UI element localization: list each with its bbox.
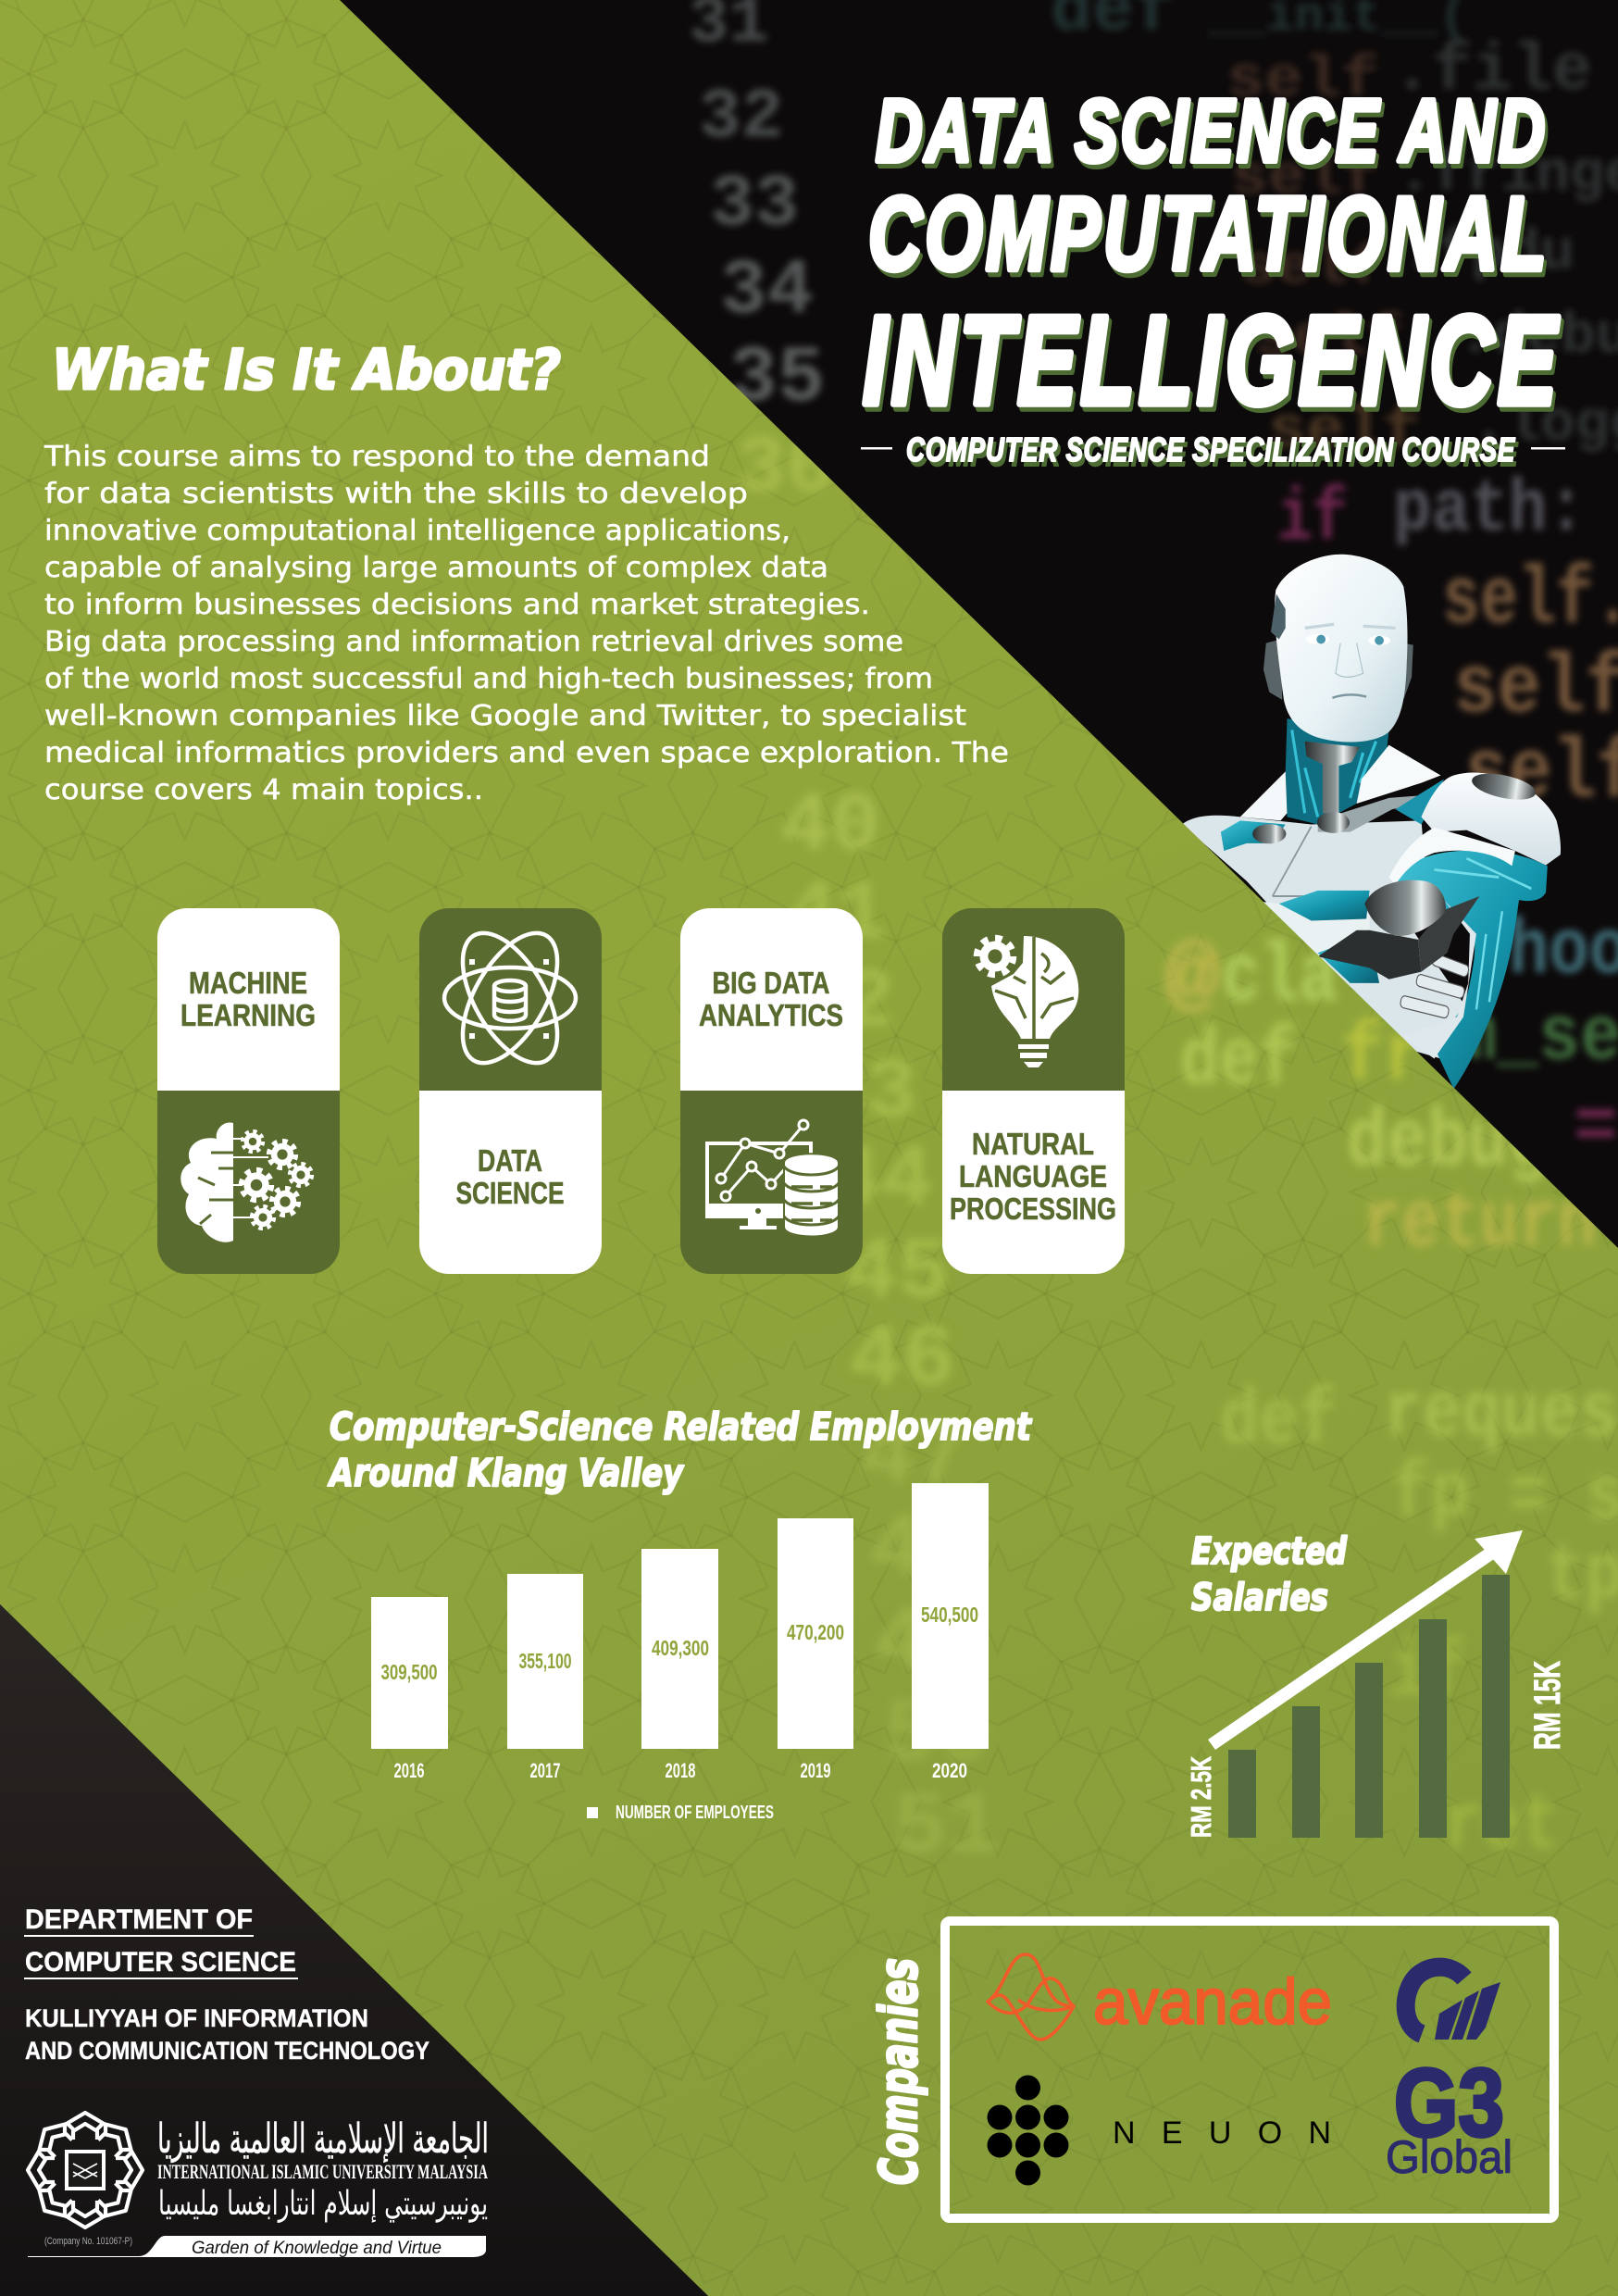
blurred code text showing through green: 40 bbox=[780, 780, 880, 875]
card: machine learning: LEARNING bbox=[180, 998, 316, 1032]
blurred code text showing through green: 51 bbox=[893, 1778, 1000, 1878]
university logo bbox=[28, 2113, 489, 2258]
robot forearm bbox=[1247, 891, 1370, 953]
blurred code text on the dark area: .fpdu bbox=[1402, 220, 1574, 286]
bar 2018: 409,300 bbox=[652, 1636, 709, 1660]
blurred code text on the dark area: 33 bbox=[710, 163, 799, 247]
card: big data analytics: ANALYTICS bbox=[699, 998, 843, 1032]
heading: employment chart bbox=[328, 1404, 1032, 1495]
robot neck bbox=[1286, 718, 1389, 824]
bar 2016: 2016 bbox=[394, 1759, 424, 1782]
blurred code text showing through green: 50 bbox=[884, 1685, 990, 1786]
body paragraph: course covers 4 main topics.. bbox=[44, 774, 483, 806]
blurred code text showing through green: def bbox=[1220, 1377, 1338, 1466]
bar 2019 bbox=[778, 1518, 853, 1782]
body paragraph: of the world most successful and high-tech businesses; from bbox=[44, 663, 933, 695]
robot nose and mouth bbox=[1332, 643, 1366, 698]
logo: G3 Global: Global bbox=[1386, 2131, 1512, 2183]
department text bbox=[24, 1904, 429, 2065]
robot torso bbox=[1182, 816, 1473, 1063]
robot shoulder pad bbox=[1422, 772, 1561, 866]
icon: monitor chart and database bbox=[705, 1120, 839, 1237]
department text: KULLIYYAH OF INFORMATION bbox=[25, 2004, 368, 2032]
blurred code text on the dark area: path: bbox=[1393, 468, 1586, 553]
bar 2017: 2017 bbox=[529, 1759, 561, 1782]
icon: atom with database bbox=[443, 917, 577, 1079]
card: natural language processing: NATURAL bbox=[972, 1127, 1094, 1161]
heading: expected salaries: Expected bbox=[1191, 1530, 1347, 1573]
bar 2020 bbox=[912, 1483, 989, 1782]
arabic university name: الجامعة الإسلامية العالمية ماليزيا bbox=[157, 2115, 489, 2163]
heading: companies: Companies bbox=[869, 1958, 929, 2185]
blurred code text showing through green bbox=[737, 424, 1618, 1878]
tagline bar: Garden of Knowledge and Virtue bbox=[192, 2239, 442, 2258]
body paragraph: innovative computational intelligence applications, bbox=[44, 515, 790, 547]
blurred code text showing through green: 42 bbox=[794, 956, 894, 1051]
blurred code text on the dark area: 32 bbox=[699, 78, 783, 157]
robot eyes bbox=[1305, 624, 1396, 645]
logo: neuon bbox=[987, 2076, 1331, 2185]
blurred code text showing through green: @ bbox=[1164, 931, 1220, 1026]
bar 2018 bbox=[641, 1549, 718, 1782]
card: natural language processing bbox=[942, 908, 1125, 1274]
salary bars bbox=[1228, 1575, 1510, 1838]
body paragraph: capable of analysing large amounts of complex data bbox=[44, 552, 828, 584]
heading: expected salaries bbox=[1191, 1530, 1347, 1619]
card: data science: DATA bbox=[478, 1143, 542, 1178]
blurred code text on the dark area: 34 bbox=[720, 248, 814, 336]
chart legend: NUMBER OF EMPLOYEES bbox=[616, 1803, 774, 1823]
label: RM 2.5K: RM 2.5K bbox=[1185, 1756, 1217, 1838]
logo: G3 Global: G3 bbox=[1394, 2050, 1504, 2157]
blurred code text showing through green: 36 bbox=[737, 424, 835, 516]
blurred code text on the dark area: self bbox=[1226, 47, 1379, 113]
body paragraph bbox=[44, 441, 1009, 806]
blurred code text on the dark area: self bbox=[1254, 306, 1404, 371]
dark bottom-left triangle bbox=[0, 1604, 708, 2296]
department text: COMPUTER SCIENCE bbox=[25, 1947, 296, 1978]
blurred code text showing through green: 48 bbox=[870, 1500, 977, 1601]
bar 2017: 355,100 bbox=[518, 1649, 572, 1673]
bar 2019: 470,200 bbox=[787, 1620, 844, 1644]
blurred code text showing through green: cla bbox=[1222, 931, 1338, 1026]
card: data science: SCIENCE bbox=[455, 1176, 565, 1210]
blurred code text on the dark area: self bbox=[1231, 149, 1379, 209]
heading: what is it about: What Is It About? bbox=[52, 338, 561, 403]
heading: employment chart: Computer-Science Related Employment bbox=[330, 1404, 1032, 1449]
title bbox=[863, 81, 1561, 430]
body paragraph: Big data processing and information retrieval drives some bbox=[44, 626, 903, 658]
blurred code text showing through green: 49 bbox=[875, 1592, 981, 1693]
blurred code text showing through green: if bbox=[1388, 1628, 1467, 1718]
card: data science bbox=[419, 908, 602, 1274]
blurred code text on the dark area bbox=[689, 0, 1618, 1171]
blurred code text showing through green: 44 bbox=[828, 1132, 933, 1230]
robot illustration bbox=[1182, 555, 1561, 1089]
label: RM 15K: RM 15K bbox=[1527, 1661, 1568, 1750]
body paragraph: to inform businesses decisions and market strategies. bbox=[44, 589, 870, 621]
blurred code text showing through green: fr bbox=[1342, 1012, 1425, 1104]
blurred code text showing through green: 45 bbox=[845, 1225, 950, 1323]
arrow bbox=[1208, 1530, 1523, 1750]
bar 2018: 2018 bbox=[665, 1759, 696, 1782]
company number: (Company No. 101067-P) bbox=[44, 2236, 132, 2247]
robot metal hand bbox=[1318, 930, 1422, 980]
bar 2016 bbox=[371, 1597, 448, 1782]
card: machine learning: MACHINE bbox=[189, 966, 307, 1000]
department text: AND COMMUNICATION TECHNOLOGY bbox=[25, 2037, 429, 2065]
blurred code text showing through green: 41 bbox=[787, 868, 887, 963]
body paragraph: medical informatics providers and even space exploration. The bbox=[44, 737, 1009, 769]
companies box bbox=[945, 1921, 1554, 2218]
jawi university name: يونيبرسيتي إسلام انتارابغسا مليسيا bbox=[158, 2185, 488, 2223]
blurred code text on the dark area: self bbox=[1240, 239, 1384, 299]
robot fingers bbox=[1400, 953, 1470, 1018]
icon: brain light bulb with gear bbox=[977, 936, 1078, 1067]
blurred code text showing through green: 43 bbox=[815, 1044, 916, 1142]
bar 2016: 309,500 bbox=[381, 1660, 437, 1684]
robot arm bbox=[1396, 850, 1548, 1089]
robot head bbox=[1275, 555, 1408, 742]
blurred code text showing through green: ret bbox=[1444, 1781, 1560, 1871]
card: machine learning bbox=[157, 908, 340, 1274]
body paragraph: This course aims to respond to the demand bbox=[44, 441, 710, 473]
card: natural language processing: PROCESSING bbox=[950, 1192, 1116, 1226]
chart legend bbox=[587, 1803, 774, 1823]
blurred code text on the dark area: .file bbox=[1392, 33, 1592, 109]
card: big data analytics: BIG DATA bbox=[713, 966, 829, 1000]
logo: avanade: avanade bbox=[1093, 1965, 1332, 2038]
english university name: INTERNATIONAL ISLAMIC UNIVERSITY MALAYSIA bbox=[157, 2160, 488, 2183]
logo: avanade bbox=[988, 1954, 1332, 2040]
card: natural language processing: LANGUAGE bbox=[959, 1159, 1107, 1193]
department text: DEPARTMENT OF bbox=[25, 1904, 253, 1935]
bar 2017 bbox=[507, 1574, 583, 1782]
blurred code text showing through green: 47 bbox=[861, 1407, 967, 1508]
body paragraph: well-known companies like Google and Twitter, to specialist bbox=[44, 700, 966, 732]
icon: brain and gears bbox=[180, 1123, 312, 1242]
body paragraph: for data scientists with the skills to develop bbox=[44, 478, 748, 510]
blurred code text on the dark area: self bbox=[1268, 398, 1421, 464]
blurred code text on the dark area: 35 bbox=[729, 333, 825, 424]
blurred code text on the dark area: if bbox=[1277, 478, 1348, 562]
blurred code text showing through green: 46 bbox=[849, 1310, 955, 1411]
blurred code text on the dark area: = bbox=[1574, 1087, 1618, 1171]
logo: neuon: NEUON bbox=[1113, 2115, 1331, 2151]
bar 2020: 2020 bbox=[932, 1759, 967, 1782]
blurred code text showing through green: debug bbox=[1347, 1096, 1549, 1191]
bar 2020: 540,500 bbox=[921, 1603, 978, 1627]
heading: expected salaries: Salaries bbox=[1191, 1577, 1328, 1619]
blurred code text showing through green: def bbox=[1180, 1017, 1298, 1108]
icon: university emblem bbox=[28, 2113, 143, 2227]
robot ears bbox=[1263, 640, 1282, 700]
bar chart: number of employees bbox=[371, 1483, 989, 1823]
bar 2019: 2019 bbox=[800, 1759, 831, 1782]
robot collar plates bbox=[1240, 771, 1287, 820]
blurred code text showing through green: fp bbox=[1391, 1450, 1470, 1540]
logo: G with bars bbox=[1406, 1967, 1500, 2040]
expected salaries chart bbox=[1185, 1530, 1568, 1838]
tagline bar bbox=[28, 2236, 486, 2258]
card: big data analytics bbox=[680, 908, 863, 1274]
heading: employment chart: Around Klang Valley bbox=[328, 1451, 685, 1495]
